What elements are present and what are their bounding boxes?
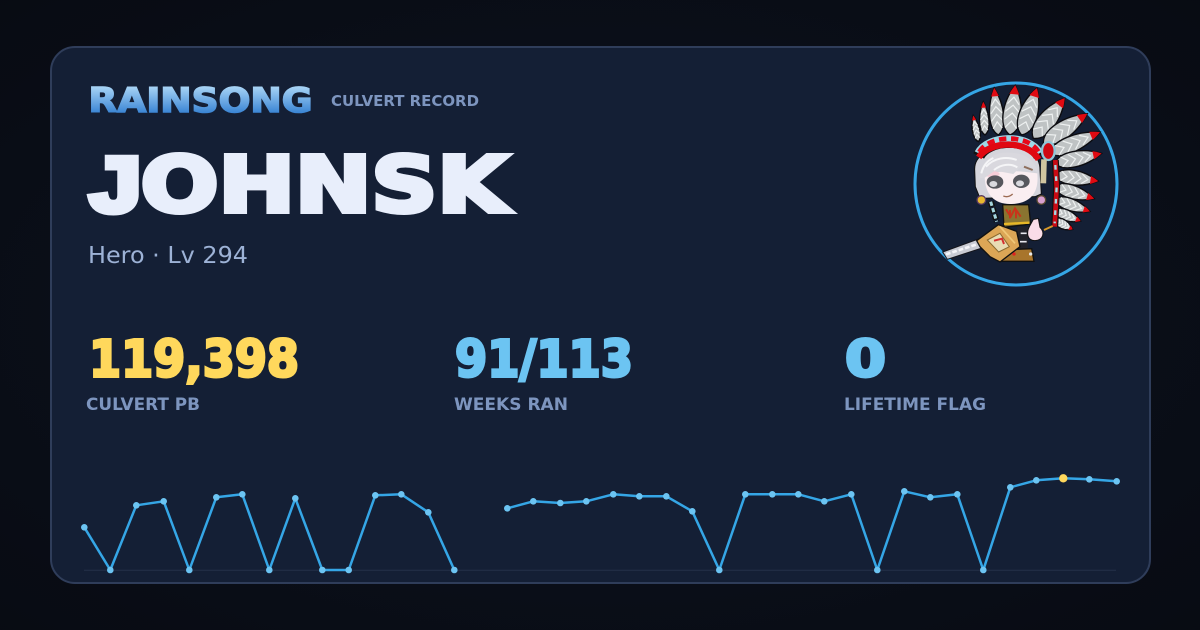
class and level: Hero · Lv 294 xyxy=(88,241,248,269)
stat: weeks ran xyxy=(454,330,633,414)
red braid xyxy=(1055,160,1057,227)
culvert pb value: 119,398 xyxy=(89,330,299,390)
sword blade xyxy=(943,239,984,259)
boots xyxy=(999,249,1034,261)
hand xyxy=(1028,218,1043,241)
line segment: early weeks xyxy=(84,494,454,570)
sword hilt xyxy=(977,225,1020,262)
headband xyxy=(979,142,1039,156)
avatar xyxy=(915,83,1117,285)
weeks ran label: WEEKS RAN xyxy=(454,395,568,414)
torso xyxy=(1003,205,1031,227)
head ornament ring xyxy=(1042,142,1055,160)
hair back xyxy=(975,147,1041,198)
eyes xyxy=(987,175,1003,189)
stat: lifetime flag xyxy=(844,330,986,414)
lifetime flag label: LIFETIME FLAG xyxy=(844,395,986,414)
hair fringe xyxy=(979,153,1038,178)
earrings xyxy=(977,196,986,204)
avatar ring xyxy=(915,83,1117,285)
culvert pb label: CULVERT PB xyxy=(86,395,200,414)
brand heading: RAINSONG xyxy=(88,81,312,120)
stat: culvert pb xyxy=(86,330,299,414)
side hair braid xyxy=(991,202,997,222)
panel: record card xyxy=(51,47,1150,583)
feathers xyxy=(970,115,982,142)
legs xyxy=(1015,227,1028,250)
player name: JOHNSK xyxy=(90,142,511,230)
weeks ran value: 91/113 xyxy=(455,330,633,390)
personal best marker xyxy=(1059,474,1068,482)
face xyxy=(985,171,1038,204)
mouth xyxy=(1003,194,1013,197)
character sprite xyxy=(943,84,1103,262)
data points xyxy=(81,476,1120,573)
line chart: culvert score history xyxy=(81,474,1120,573)
subtitle: culvert record: CULVERT RECORD xyxy=(331,92,479,110)
line segment: later weeks xyxy=(507,478,1117,570)
blush xyxy=(984,171,1000,177)
headdress strap xyxy=(1035,159,1052,183)
lifetime flag value: 0 xyxy=(845,330,886,390)
